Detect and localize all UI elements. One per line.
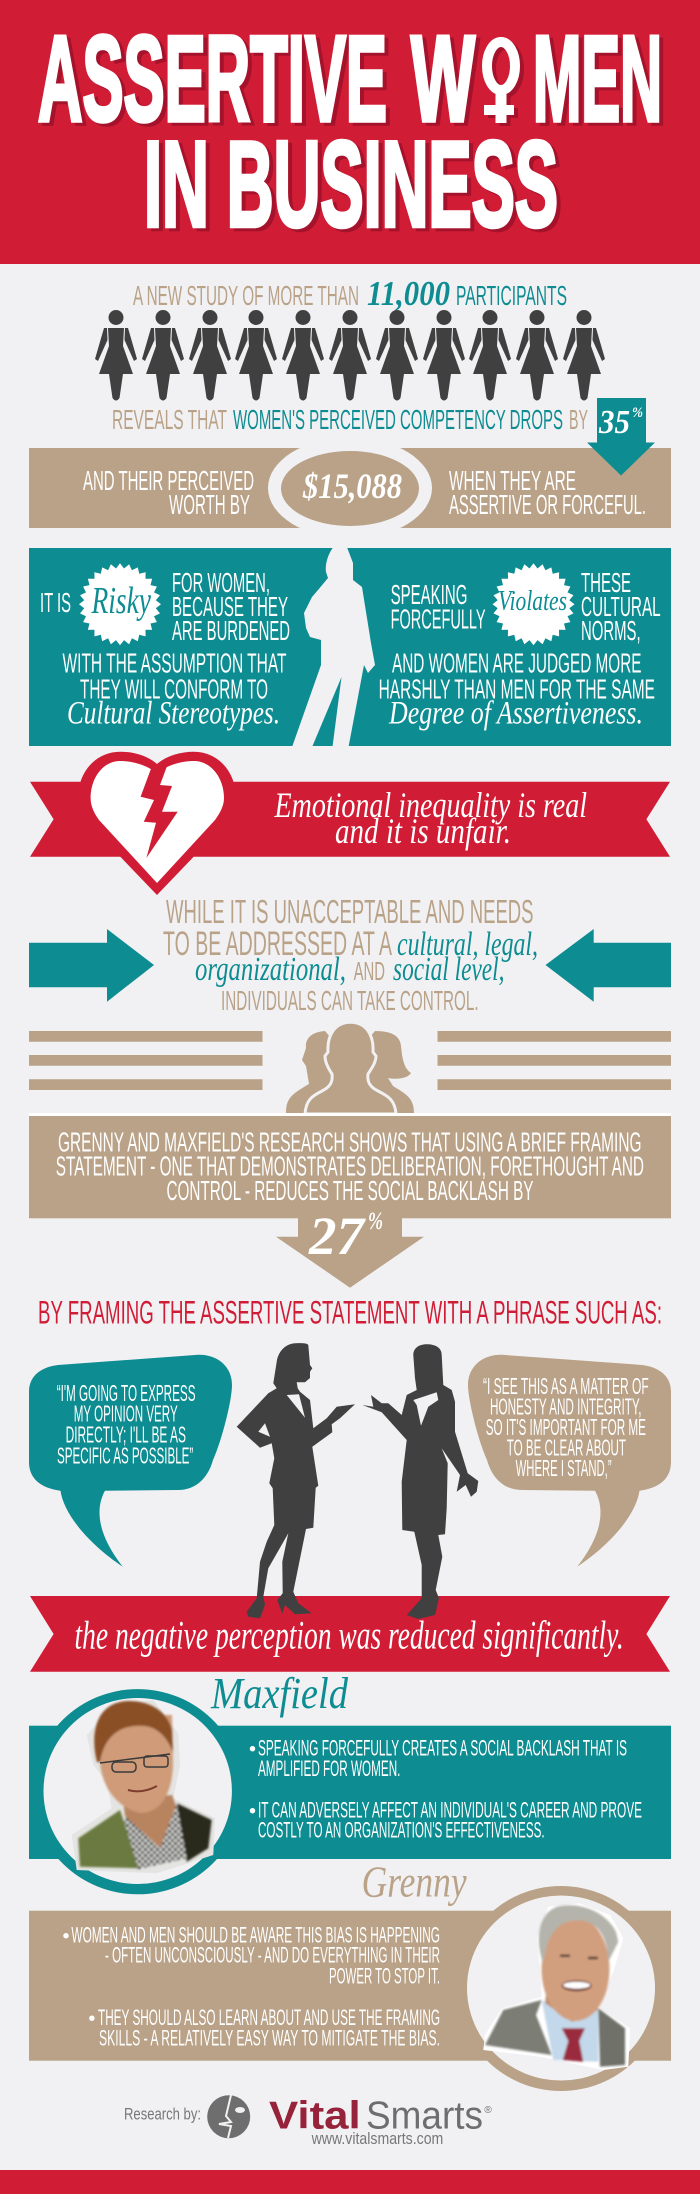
silhouette: standing woman [292, 548, 375, 746]
worth text left: WORTH BY [169, 489, 250, 520]
portrait: Maxfield [72, 1700, 215, 1873]
competency text: REVEALS THAT [112, 404, 227, 435]
oval: amount [281, 451, 419, 526]
footer: research credit: Research by: [124, 2104, 201, 2123]
ribbon: negative perception [30, 1596, 670, 1672]
silhouette: left businesswoman [237, 1343, 355, 1618]
left text block: THEY WILL CONFORM TO [80, 673, 268, 704]
panel: risky and violates [29, 548, 671, 746]
starburst: risky [79, 563, 161, 645]
logo wordmark: Vital [269, 2094, 361, 2137]
decorative bars with people icon [29, 1022, 671, 1116]
row of eleven women icons [95, 310, 605, 400]
ribbon text [274, 785, 587, 851]
logo wordmark [269, 2094, 492, 2148]
panel: Grenny [29, 1886, 671, 2091]
left text block: WITH THE ASSUMPTION THAT [62, 648, 286, 679]
Maxfield bullet points: • [249, 1739, 256, 1761]
text: individuals can take control: INDIVIDUALS CAN TAKE CONTROL. [221, 985, 479, 1016]
ribbon text: Emotional inequality is real [274, 785, 587, 825]
Grenny bullet points: • [62, 1925, 70, 1947]
footer bar [0, 2170, 700, 2194]
text: individuals can take control: TO BE ADDRESSED AT A [163, 925, 392, 963]
logo wordmark: Smarts [366, 2094, 483, 2137]
left text block [40, 567, 290, 731]
speech bubble: left: DIRECTLY; I'LL BE AS [66, 1422, 186, 1448]
title: W [411, 11, 475, 147]
ribbon text: and it is unfair. [335, 811, 511, 851]
right text block: FORCEFULLY [391, 604, 486, 635]
starburst: violates [492, 563, 574, 645]
Maxfield bullet points: AMPLIFIED FOR WOMEN. [258, 1756, 400, 1781]
icon: VitalSmarts logo [207, 2095, 250, 2138]
text: individuals can take control: organizational, [195, 951, 346, 988]
title [38, 11, 662, 252]
speech bubble: left: SPECIFIC AS POSSIBLE” [57, 1442, 193, 1468]
Grenny bullet points: POWER TO STOP IT. [329, 1963, 440, 1988]
speech bubble: right [468, 1355, 671, 1567]
right text block [379, 567, 661, 731]
worth text left [83, 465, 254, 520]
footer: research credit [124, 2094, 492, 2148]
arrow: 35 percent drop: % [632, 405, 643, 421]
worth band: $15,088 [302, 466, 402, 506]
speech bubble: left [29, 1355, 232, 1567]
Maxfield bullet points: • [249, 1800, 256, 1822]
logo wordmark: www.vitalsmarts.com [311, 2129, 443, 2148]
speech bubble: left: “I'M GOING TO EXPRESS [57, 1380, 196, 1406]
worth text left: AND THEIR PERCEIVED [83, 465, 254, 496]
Grenny bullet points [62, 1922, 440, 2051]
worth band [29, 436, 671, 540]
icon: broken heart [78, 752, 236, 895]
arrow: 27 percent: % [368, 1208, 383, 1235]
starburst: risky: Risky [91, 580, 151, 622]
right text block: THESE [581, 567, 631, 598]
right text block: SPEAKING [391, 579, 467, 610]
portrait: Grenny [483, 1903, 630, 2070]
study intro text: PARTICIPANTS [456, 280, 567, 311]
arrow: 27 percent: 27 [308, 1206, 366, 1266]
panel: Maxfield [29, 1689, 671, 1894]
arrow: 35 percent drop [587, 398, 655, 476]
left text block: Cultural Stereotypes. [67, 695, 280, 731]
competency text: BY [569, 404, 588, 435]
right text block: NORMS, [581, 615, 641, 646]
study intro text: 11,000 [367, 274, 450, 313]
left text block: FOR WOMEN, [172, 567, 270, 598]
text: individuals can take control: social level, [393, 951, 504, 988]
left text block: IT IS [40, 587, 71, 618]
Grenny bullet points: SKILLS - A RELATIVELY EASY WAY TO MITIGATE THE BIAS. [99, 2026, 440, 2051]
ribbon: emotional inequality [30, 752, 670, 895]
arrow: 35 percent drop: 35 [598, 404, 630, 441]
Grenny bullet points: • [88, 2008, 95, 2030]
worth text right: WHEN THEY ARE [449, 465, 576, 496]
arrow: right-pointing [29, 929, 154, 1002]
Maxfield bullet points [249, 1736, 642, 1843]
icon: three people [286, 1022, 414, 1114]
heading: Grenny: Grenny [362, 1858, 467, 1907]
header banner [0, 0, 700, 264]
text: individuals can take control: AND [354, 956, 385, 986]
speech bubble: left: MY OPINION VERY [74, 1401, 178, 1427]
text: individuals can take control: cultural, legal, [397, 926, 538, 963]
arrow: 27 percent [276, 1206, 424, 1288]
silhouette: right businesswoman [362, 1344, 478, 1619]
heading: Maxfield: Maxfield [210, 1669, 349, 1718]
text: individuals can take control [163, 893, 538, 1016]
panel: framing research [29, 1116, 671, 1218]
left text block: ARE BURDENED [172, 615, 290, 646]
study intro text: A NEW STUDY OF MORE THAN [133, 280, 359, 311]
competency text [112, 404, 588, 435]
starburst: violates: Violates [498, 586, 567, 617]
left text block: BECAUSE THEY [172, 591, 288, 622]
worth text right [449, 465, 646, 520]
arrow: left-pointing [546, 929, 671, 1002]
logo wordmark: ® [484, 2105, 492, 2116]
